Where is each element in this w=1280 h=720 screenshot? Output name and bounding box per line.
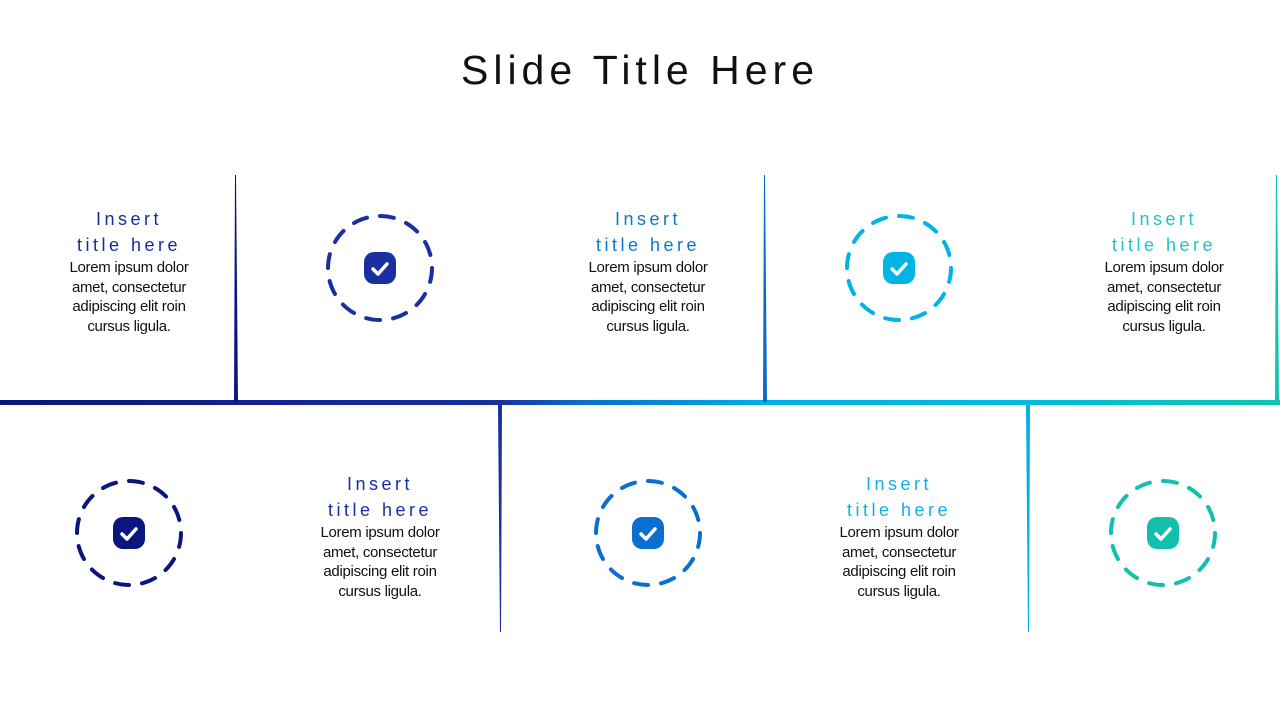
text block 3: Lorem ipsum dolor amet, consectetur adipiscing elit roin cursus ligula.	[1104, 259, 1224, 334]
text block 2	[588, 209, 708, 334]
icon: check 2	[845, 214, 953, 322]
text block 1: title here	[77, 235, 181, 255]
text block 4: title here	[328, 500, 432, 520]
text block 2: title here	[596, 235, 700, 255]
icon: check 4	[594, 479, 702, 587]
text block 2: Lorem ipsum dolor amet, consectetur adipiscing elit roin cursus ligula.	[588, 259, 708, 334]
text block 3: title here	[1112, 235, 1216, 255]
text block 4: Insert	[347, 474, 413, 494]
text block 4	[320, 474, 440, 600]
text block 3	[1104, 209, 1224, 334]
text block 2: Insert	[615, 209, 681, 229]
text block 5: title here	[847, 500, 951, 520]
text block 4: Lorem ipsum dolor amet, consectetur adipiscing elit roin cursus ligula.	[320, 524, 440, 600]
text block 5	[839, 474, 959, 600]
text block 1: Insert	[96, 209, 162, 229]
icon: check 5	[1109, 479, 1217, 587]
text block 5: Insert	[866, 474, 932, 494]
icon: check 1	[326, 214, 434, 322]
text block 5: Lorem ipsum dolor amet, consectetur adipiscing elit roin cursus ligula.	[839, 524, 959, 600]
title: Slide Title Here	[461, 47, 819, 93]
icon: check 3	[75, 479, 183, 587]
text block 1: Lorem ipsum dolor amet, consectetur adipiscing elit roin cursus ligula.	[69, 259, 189, 334]
text block 1	[69, 209, 189, 334]
text block 3: Insert	[1131, 209, 1197, 229]
